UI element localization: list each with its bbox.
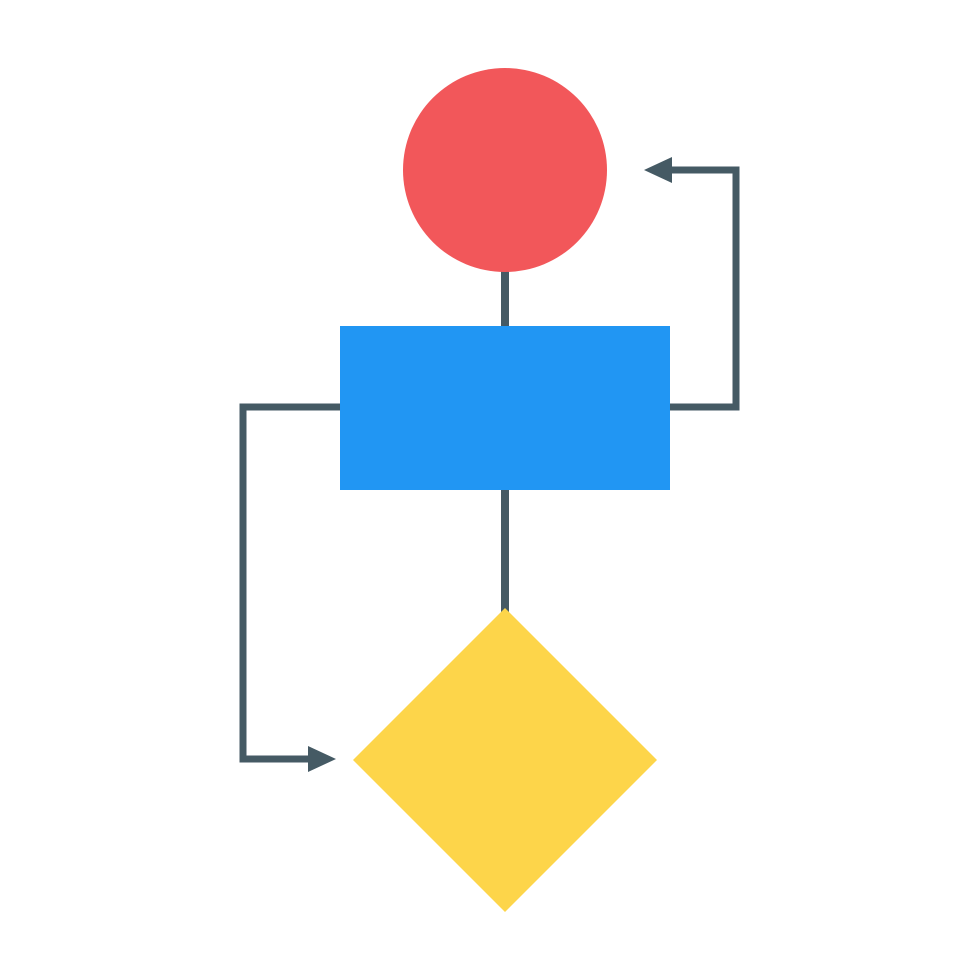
connector: circle to rectangle bbox=[501, 265, 509, 330]
arrow: right loop to circle bbox=[644, 157, 736, 407]
process rectangle bbox=[340, 326, 670, 490]
arrow: left loop to diamond bbox=[243, 407, 342, 772]
decision diamond bbox=[353, 608, 657, 912]
start circle bbox=[403, 68, 607, 272]
connector: rectangle to diamond bbox=[501, 485, 509, 615]
